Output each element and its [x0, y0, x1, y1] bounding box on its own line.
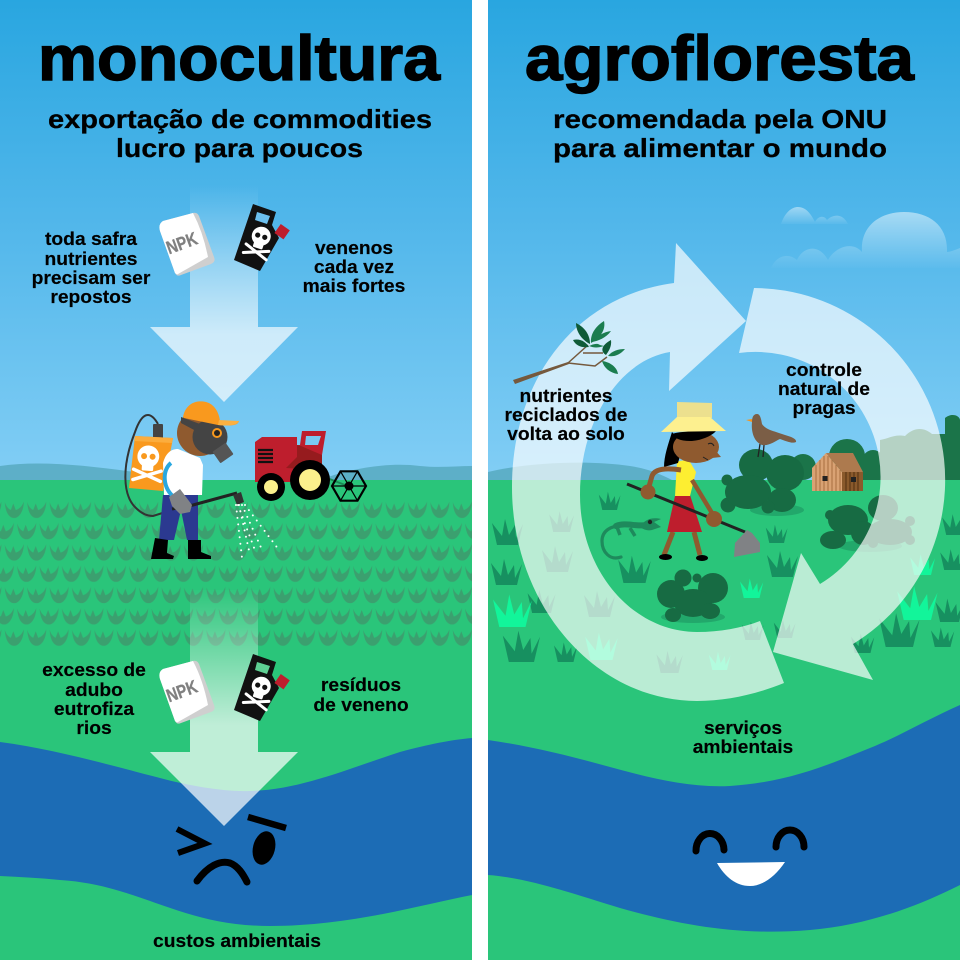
- icon: NPK bag top: [159, 213, 215, 276]
- subtitle: agrofloresta: recomendada pela ONU: [553, 104, 887, 134]
- icon: leafy twig: [513, 321, 625, 384]
- icon: NPK bag bottom: NPK: [164, 676, 200, 707]
- label: residuos de veneno: de veneno: [313, 695, 409, 715]
- label: excesso de adubo: excesso de: [42, 660, 146, 680]
- distant hill: [488, 463, 672, 480]
- label: residuos de veneno: [314, 677, 408, 712]
- figure: woman with hoe: [627, 402, 760, 561]
- label: servicos ambientais: ambientais: [693, 737, 793, 757]
- label: nutrientes reciclados: volta ao solo: [507, 424, 625, 444]
- icon: NPK bag top: NPK: [164, 228, 200, 259]
- label: venenos: venenos: [315, 238, 393, 258]
- label: controle natural de pragas: controle: [786, 360, 862, 380]
- label: controle natural de pragas: pragas: [792, 398, 856, 418]
- spray droplets: [236, 505, 279, 558]
- happy river face: [696, 830, 804, 886]
- label: excesso de adubo: [42, 660, 146, 738]
- label: excesso de adubo: eutrofiza: [54, 699, 135, 719]
- subtitle: agrofloresta: para alimentar o mundo: [553, 133, 887, 163]
- label: venenos: [304, 244, 405, 292]
- cycle arrow: right ring: [739, 288, 945, 680]
- grass tufts bright: [493, 554, 938, 670]
- river: [488, 705, 960, 932]
- label: residuos de veneno: resíduos: [321, 675, 401, 695]
- label: excesso de adubo: rios: [76, 718, 112, 738]
- subtitle: agrofloresta: [553, 104, 887, 163]
- figure: farmer with gas mask: [151, 401, 244, 559]
- label: custos ambientais: custos ambientais: [153, 931, 321, 951]
- label: nutrientes repostos: repostos: [50, 287, 132, 307]
- arrow: runoff down: [150, 590, 298, 826]
- sad river face: [177, 817, 286, 882]
- cycle arrow: left ring: [512, 243, 784, 701]
- label: excesso de adubo: adubo: [65, 680, 123, 700]
- crop rows: [0, 498, 472, 648]
- title: monocultura: monocultura: [38, 24, 441, 94]
- label: controle natural de pragas: [778, 360, 870, 418]
- label: nutrientes repostos: precisam ser: [32, 268, 150, 288]
- icon: wooden cabin: [812, 453, 863, 491]
- bush: center: [720, 449, 804, 516]
- label: servicos ambientais: serviços: [704, 718, 782, 738]
- panel: agrofloresta: [488, 0, 960, 960]
- subtitle: monocultura: [48, 104, 432, 163]
- label: nutrientes reciclados: nutrientes: [519, 386, 613, 406]
- label: venenos: cada vez: [314, 257, 394, 277]
- icon: lizard: [602, 518, 661, 558]
- river: [0, 738, 472, 926]
- icon: sprayer tank and hose: [125, 415, 173, 516]
- label: venenos: mais fortes: [303, 276, 405, 296]
- icon: NPK bag bottom: [159, 661, 215, 724]
- icon: red tractor with harrow: [255, 431, 366, 501]
- bush: right under arrow: [820, 495, 915, 552]
- panel: monocultura: [0, 0, 472, 960]
- label: servicos ambientais: [693, 720, 792, 754]
- clouds: [771, 207, 960, 268]
- arrow: inputs down: [150, 185, 298, 402]
- trees behind cabin: [790, 415, 960, 482]
- subtitle: monocultura: exportação de commodities: [48, 104, 432, 134]
- label: nutrientes reciclados: [506, 388, 627, 440]
- icon: bird: [746, 414, 796, 457]
- title: agrofloresta: agrofloresta: [525, 24, 915, 94]
- subtitle: monocultura: lucro para poucos: [116, 133, 363, 163]
- bush: bottom: [657, 570, 728, 623]
- label: nutrientes repostos: toda safra: [45, 229, 138, 249]
- label: nutrientes reciclados: reciclados de: [504, 405, 628, 425]
- label: nutrientes repostos: [32, 229, 150, 307]
- icon: poison bottle top: [234, 204, 290, 271]
- icon: poison bottle bottom: [234, 654, 290, 721]
- label: controle natural de pragas: natural de: [778, 379, 870, 399]
- grass tufts dark: [491, 492, 960, 673]
- label: nutrientes repostos: nutrientes: [44, 249, 138, 269]
